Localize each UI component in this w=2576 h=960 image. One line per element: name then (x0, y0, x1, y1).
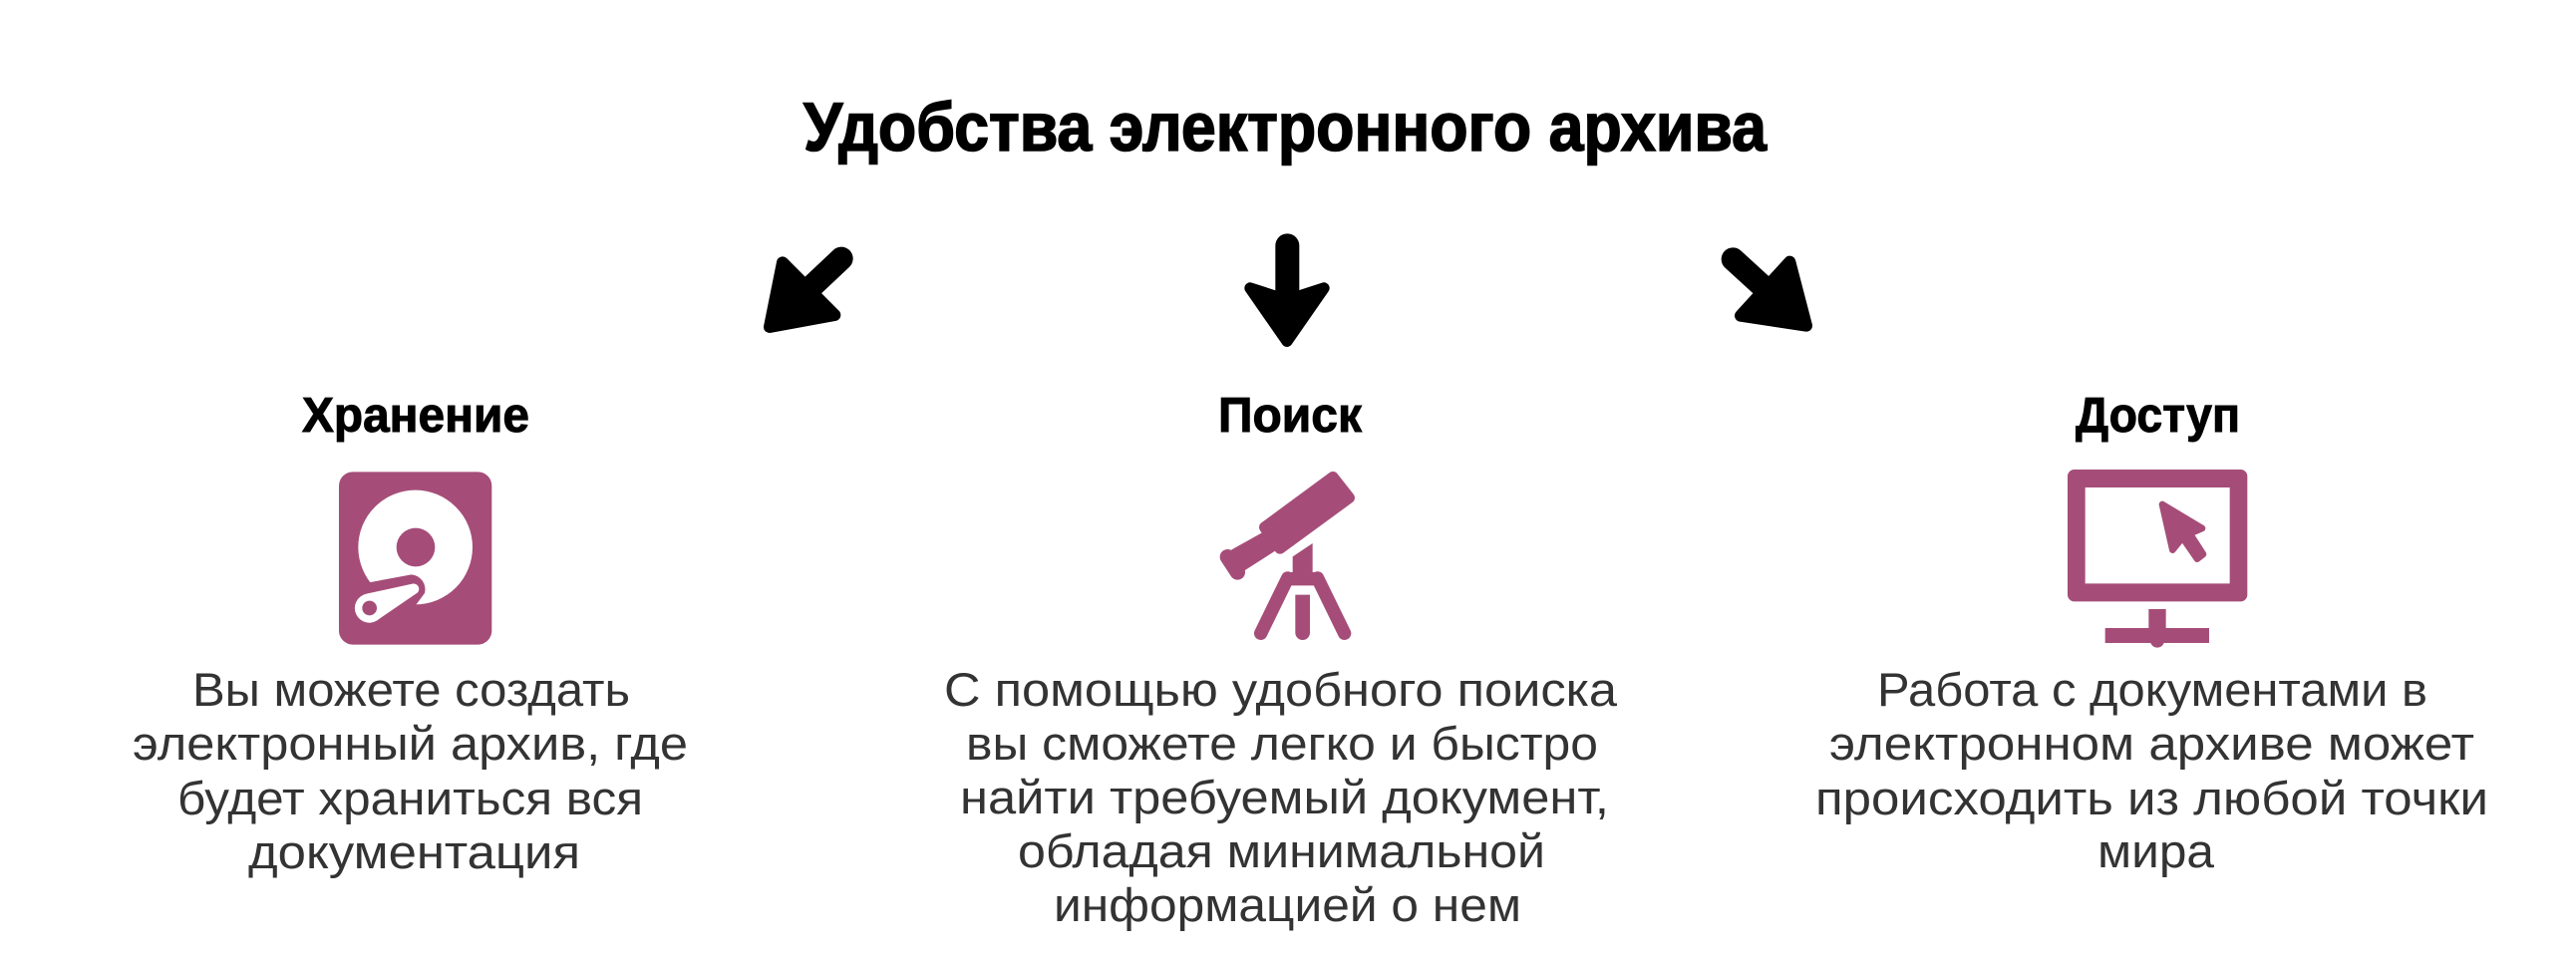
icon: hard drive (339, 472, 491, 645)
text: storage description: Вы можете создать (192, 664, 630, 717)
text: search description: найти требуемый документ, (960, 772, 1609, 824)
text: search description: информацией о нем (1054, 879, 1521, 932)
text: storage description (133, 664, 688, 879)
panel: access (1815, 389, 2488, 878)
heading: access: Доступ (2076, 389, 2240, 443)
text: search description: вы сможете легко и быстро (966, 718, 1598, 771)
text: search description: С помощью удобного поиска (944, 664, 1618, 717)
heading: storage: Хранение (302, 389, 529, 443)
title: Удобства электронного архива (804, 89, 1768, 165)
panel: storage (133, 389, 688, 879)
text: access description: Работа с документами в (1877, 664, 2427, 717)
heading: search: Поиск (1218, 389, 1362, 443)
text: access description: электронном архиве может (1829, 718, 2474, 771)
text: access description: происходить из любой точки (1815, 773, 2488, 825)
text: storage description: будет храниться вся (177, 773, 643, 825)
text: search description: обладая минимальной (1018, 825, 1545, 878)
text: storage description: документация (248, 826, 580, 879)
text: search description (944, 664, 1618, 932)
text: access description: мира (2097, 825, 2215, 878)
text: access description (1815, 664, 2488, 878)
icon: telescope (1227, 478, 1349, 640)
panel: search (944, 389, 1618, 932)
arrow: down-left (770, 258, 841, 327)
text: storage description: электронный архив, где (133, 718, 688, 771)
icon: monitor with cursor (2068, 470, 2247, 648)
arrow: down-right (1733, 259, 1806, 326)
arrow: down (1250, 245, 1324, 341)
